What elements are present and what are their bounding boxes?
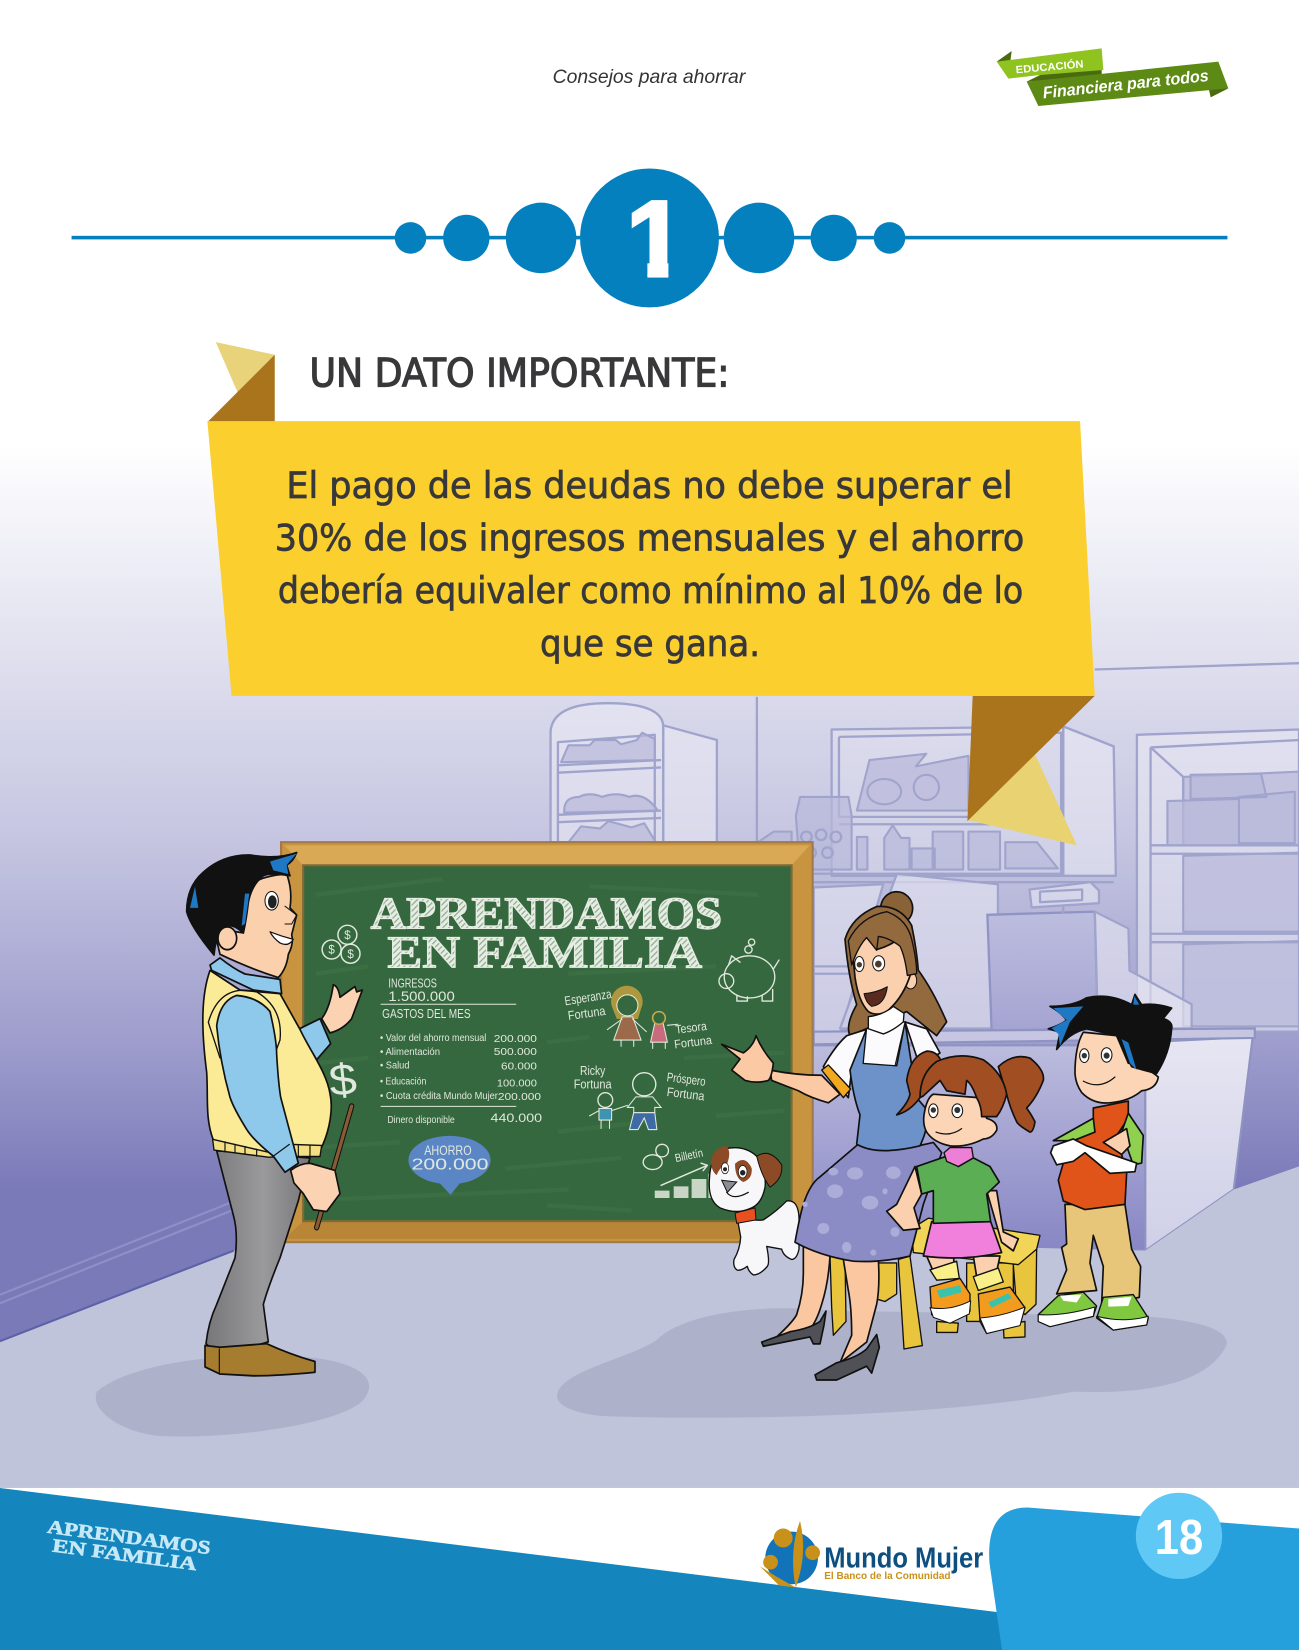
callout text: El pago de las deudas no debe superar el bbox=[286, 464, 1013, 507]
pointing hand bbox=[722, 1036, 773, 1082]
nose and mouth bbox=[285, 906, 297, 924]
heading: un dato importante: UN DATO IMPORTANTE: bbox=[309, 351, 730, 396]
badge: educación financiera bbox=[997, 48, 1228, 106]
pigtails bbox=[897, 1051, 942, 1115]
floor line left bbox=[0, 1251, 234, 1341]
dog head bbox=[709, 1148, 765, 1211]
boy eyes and mouth bbox=[1080, 1049, 1089, 1063]
pointer stick bbox=[317, 1106, 352, 1228]
chalk billetín cat and stairs bbox=[643, 1144, 718, 1198]
yellow ribbon callout bbox=[207, 342, 1095, 845]
stool legs bbox=[830, 1249, 1037, 1349]
chalk billetín cat and stairs: Billetín bbox=[674, 1147, 704, 1165]
budget list: INGRESOS bbox=[388, 976, 437, 990]
chalk family drawing: men: Fortuna bbox=[574, 1077, 612, 1091]
budget list: 1.500.000 bbox=[388, 989, 455, 1004]
face bbox=[853, 938, 911, 1014]
boy shoes bbox=[1038, 1292, 1148, 1330]
skirt bbox=[795, 1142, 942, 1262]
pointing arm bbox=[770, 1070, 840, 1103]
apron dress bbox=[850, 1022, 928, 1151]
legs bbox=[777, 1244, 830, 1337]
badge ribbon shapes bbox=[997, 51, 1228, 97]
callout text: debería equivaler como mínimo al 10% de lo bbox=[278, 569, 1023, 612]
floor shadow left bbox=[96, 1356, 369, 1437]
ribbon body bbox=[207, 421, 1095, 696]
footer white band bbox=[0, 1488, 1299, 1650]
character: stool bbox=[830, 1218, 1040, 1349]
callout text bbox=[275, 464, 1024, 665]
footer title: APRENDAMOS bbox=[46, 1517, 212, 1559]
skirt spots bbox=[802, 1167, 901, 1256]
footer bbox=[0, 1488, 1299, 1650]
floor bbox=[0, 1166, 1299, 1489]
chalk family drawing: women: Esperanza bbox=[564, 987, 613, 1008]
page number bbox=[1136, 1493, 1222, 1579]
dog ears and markings bbox=[757, 1153, 782, 1187]
page header text: Consejos para ahorrar bbox=[553, 67, 746, 88]
logo globe bbox=[765, 1532, 818, 1584]
neck collar bbox=[868, 1006, 904, 1034]
boy hair bbox=[1048, 994, 1172, 1074]
raised forearm and hand bbox=[298, 1019, 331, 1060]
arms bbox=[887, 1167, 922, 1230]
budget list: 200.000 bbox=[498, 1091, 541, 1103]
neck and face bbox=[217, 874, 297, 978]
chalk coins: $ bbox=[344, 930, 351, 942]
chalk dollar note: $ bbox=[327, 1055, 359, 1106]
trousers bbox=[1057, 1204, 1141, 1304]
logo name: Mundo Mujer bbox=[824, 1542, 983, 1574]
character: boy bbox=[1038, 994, 1172, 1330]
dog collar bbox=[735, 1208, 756, 1223]
chalk family drawing: women: Fortuna bbox=[567, 1004, 607, 1023]
chalkboard bbox=[281, 842, 813, 1242]
blouse cuff bbox=[822, 1065, 851, 1098]
board frame bbox=[281, 842, 813, 1242]
savings bubble: AHORRO bbox=[424, 1143, 472, 1158]
budget list bbox=[380, 976, 542, 1126]
lower hand bbox=[291, 1163, 340, 1212]
blouse sleeves bbox=[823, 1029, 868, 1098]
counter side and top bbox=[1145, 1037, 1253, 1251]
budget list: • Educación bbox=[380, 1076, 426, 1087]
sleeve bbox=[217, 995, 298, 1172]
crossed white arms bbox=[1051, 1139, 1137, 1173]
jacket bbox=[1058, 1101, 1128, 1210]
girl shoes bbox=[930, 1278, 1025, 1334]
floor shadow right bbox=[557, 1308, 1227, 1418]
badge: educación financiera: Financiera para todos bbox=[1042, 66, 1210, 102]
back counter box bbox=[695, 832, 792, 851]
ribbon upper fold bbox=[216, 342, 275, 398]
savings bubble bbox=[408, 1136, 491, 1195]
girl face bbox=[924, 1094, 997, 1146]
shoes bbox=[205, 1344, 315, 1376]
ribbon lower fold bbox=[967, 754, 1077, 845]
chalk family drawing: men: Próspero bbox=[666, 1070, 706, 1089]
callout text: 30% de los ingresos mensuales y el ahorro bbox=[275, 517, 1024, 560]
chalk smudges bbox=[316, 879, 784, 1211]
budget list: • Cuota crédita Mundo Mujer bbox=[380, 1091, 499, 1102]
bread shelf bbox=[551, 703, 717, 842]
chalk family drawing: women: Fortuna bbox=[673, 1033, 713, 1051]
board surface bbox=[303, 865, 792, 1221]
blouse chest bbox=[863, 1022, 905, 1066]
boy face bbox=[1075, 1032, 1158, 1103]
budget list: GASTOS DEL MES bbox=[382, 1007, 471, 1021]
budget list: 440.000 bbox=[491, 1113, 542, 1125]
left wall baseboard lines bbox=[0, 1202, 232, 1303]
counter top section bbox=[814, 874, 1192, 1042]
budget list: 60.000 bbox=[501, 1061, 537, 1073]
budget list: 100.000 bbox=[497, 1077, 537, 1089]
upper wall lines bbox=[757, 663, 1299, 842]
eyes and mouth bbox=[855, 956, 864, 972]
logo: mundo mujer bbox=[760, 1521, 983, 1587]
chalk coins bbox=[322, 925, 360, 963]
callout text: que se gana. bbox=[540, 622, 760, 665]
chalk piggy bank bbox=[719, 939, 779, 1001]
character: girl bbox=[887, 1051, 1043, 1334]
boy hand bbox=[1103, 1129, 1130, 1154]
character: dog bbox=[709, 1146, 799, 1275]
budget list: • Alimentación bbox=[380, 1047, 440, 1058]
store background bbox=[0, 663, 1299, 1303]
counter front bbox=[813, 1045, 1145, 1251]
girl eyes and mouth bbox=[929, 1104, 938, 1118]
socks bbox=[930, 1261, 1003, 1290]
logo tagline: El Banco de la Comunidad bbox=[824, 1570, 951, 1582]
footer dark blue wedge bbox=[0, 1488, 1011, 1650]
budget list: 200.000 bbox=[494, 1033, 537, 1045]
board title: EN FAMILIA bbox=[387, 927, 703, 977]
ear bbox=[218, 927, 237, 950]
trousers bbox=[206, 1151, 310, 1356]
girl hair top bbox=[920, 1056, 1007, 1117]
badge text: EDUCACIÓN bbox=[1015, 57, 1084, 76]
shoes bbox=[762, 1311, 826, 1346]
number 1: 1 bbox=[626, 179, 686, 299]
chalk family drawing: men: Fortuna bbox=[666, 1085, 706, 1104]
green sleeves bbox=[1053, 1113, 1143, 1165]
budget list: Dinero disponible bbox=[387, 1114, 455, 1126]
stool seat bbox=[912, 1218, 1040, 1265]
number timeline bbox=[72, 168, 1227, 307]
vest bbox=[203, 970, 331, 1156]
vest ribbing bbox=[213, 1139, 322, 1157]
girl legs bbox=[927, 1256, 1000, 1277]
chalk coins: $ bbox=[328, 945, 335, 957]
chalk family drawing: men: Ricky bbox=[580, 1064, 606, 1078]
dog body bbox=[734, 1201, 799, 1275]
chalk family drawing: women: Tesora bbox=[674, 1019, 708, 1037]
board title bbox=[371, 888, 722, 977]
character: father bbox=[187, 853, 362, 1376]
hair bbox=[187, 853, 297, 955]
budget list: • Valor del ahorro mensual bbox=[380, 1033, 486, 1044]
page number: 18 bbox=[1155, 1510, 1203, 1565]
savings bubble: 200.000 bbox=[412, 1157, 489, 1174]
fringe bbox=[848, 912, 917, 975]
footer light blue panel bbox=[989, 1507, 1299, 1650]
footer title: EN FAMILIA bbox=[51, 1536, 198, 1575]
collar bbox=[210, 958, 282, 994]
eye bbox=[265, 891, 278, 910]
chalk coins: $ bbox=[347, 949, 354, 961]
chalk family drawing: women bbox=[564, 986, 713, 1051]
budget list: • Salud bbox=[380, 1060, 409, 1071]
collar bbox=[944, 1148, 973, 1167]
chalk family drawing: men bbox=[574, 1064, 706, 1130]
ear bbox=[905, 972, 917, 989]
hair bun and back hair bbox=[881, 892, 913, 925]
product shelf bbox=[796, 726, 1116, 882]
skirt pink bbox=[923, 1222, 1002, 1258]
footer title bbox=[44, 1517, 212, 1577]
character: mother bbox=[722, 892, 947, 1380]
board title: APRENDAMOS bbox=[371, 888, 722, 938]
t-shirt bbox=[917, 1156, 999, 1223]
budget list: 500.000 bbox=[494, 1046, 537, 1058]
right shelving bbox=[1137, 730, 1299, 1032]
